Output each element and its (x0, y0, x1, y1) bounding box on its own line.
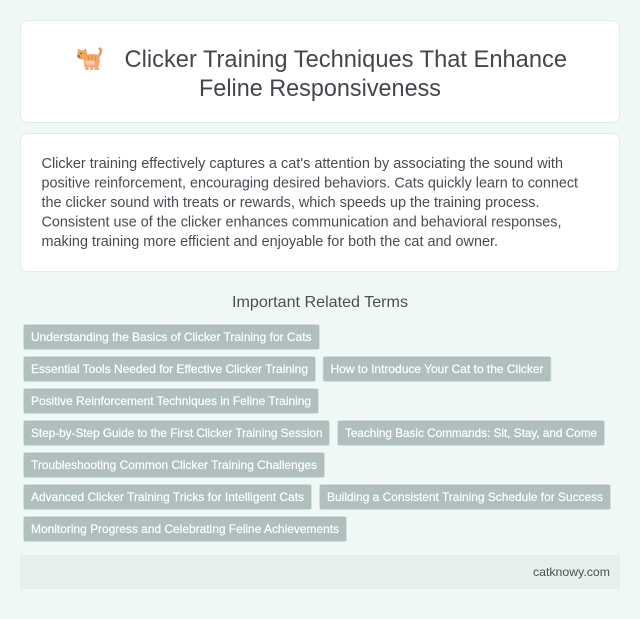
title (124, 46, 567, 102)
tag: reinforcement: Positive Reinforcement Techniques in Feline Training (31, 394, 311, 408)
footer: catknowy.com (533, 565, 610, 579)
tag: progress: Monitoring Progress and Celebrating Feline Achievements (31, 522, 339, 536)
tag: first session (24, 420, 330, 446)
tag: introduce (323, 356, 551, 382)
tag: tools: Essential Tools Needed for Effective Clicker Training (31, 362, 308, 376)
heading: related terms: Important Related Terms (232, 294, 408, 311)
tag: commands: Teaching Basic Commands: Sit, Stay, and Come (345, 426, 597, 440)
tag: troubleshooting: Troubleshooting Common Clicker Training Challenges (31, 458, 317, 472)
tag: schedule (320, 484, 610, 510)
panel: description (20, 134, 620, 272)
panel: description: Consistent use of the clicker enhances communication and behavioral responses, (42, 214, 562, 230)
tag: advanced (24, 484, 312, 510)
tag: reinforcement (24, 388, 318, 414)
tag: basics: Understanding the Basics of Clicker Training for Cats (31, 330, 312, 344)
title: Feline Responsiveness (199, 75, 441, 102)
tag: first session: Step-by-Step Guide to the First Clicker Training Session (31, 426, 322, 440)
tag: schedule: Building a Consistent Training Schedule for Success (327, 490, 603, 504)
panel: description: positive reinforcement, encouraging desired behaviors. Cats quickly learn to connect (42, 176, 578, 192)
tag: basics (24, 324, 320, 350)
tag: advanced: Advanced Clicker Training Tricks for Intelligent Cats (31, 490, 304, 504)
tag: introduce: How to Introduce Your Cat to the Clicker (330, 362, 544, 376)
tag: tools (24, 356, 316, 382)
tag: commands (338, 420, 604, 446)
panel: related term tags (24, 324, 610, 542)
icon: cat (77, 47, 102, 70)
tag: progress (24, 516, 346, 542)
panel: description: the clicker sound with treats or rewards, which speeds up the training process. (42, 195, 540, 211)
panel: description: Clicker training effectively captures a cat's attention by associating the sound with (42, 156, 563, 172)
tag: troubleshooting (24, 452, 324, 478)
footer (20, 555, 620, 589)
panel: description: making training more efficient and enjoyable for both the cat and owner. (42, 234, 498, 250)
title: Clicker Training Techniques That Enhance (124, 46, 567, 73)
panel: title card (20, 20, 620, 122)
